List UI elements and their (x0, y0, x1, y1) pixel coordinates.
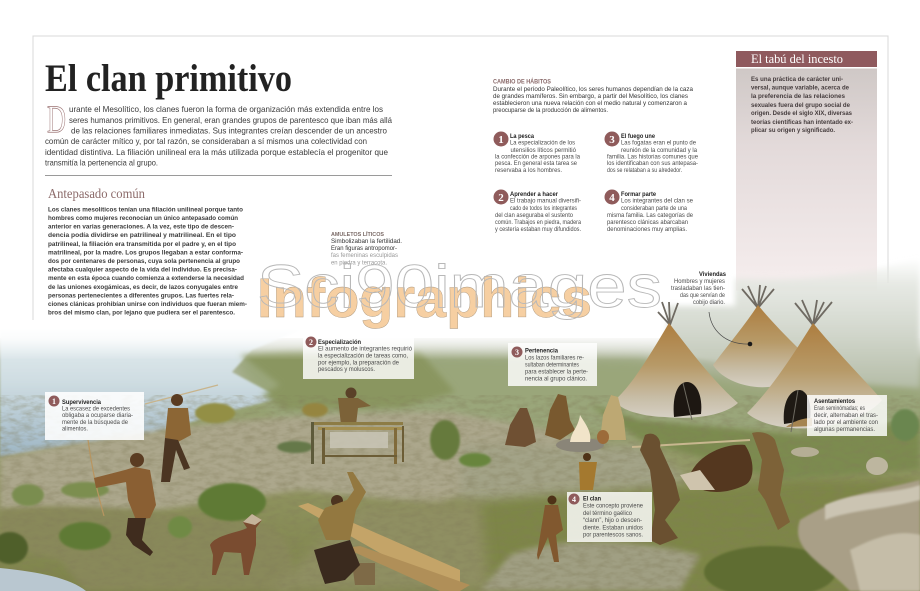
callout: el clan: diente. Estaban unidos (583, 526, 643, 532)
panel text: versal, aunque variable, acerca de (751, 85, 849, 92)
grass tufts (0, 403, 919, 591)
article text: bros del mismo clan, por lejano que pudiera ser el parentesco. (48, 310, 235, 317)
callout: supervivencia: Supervivencia (62, 400, 102, 406)
article text: de las uniones exogámicas, es decir, de lazos conyugales entre (48, 284, 238, 291)
section: cambio de hábitos (493, 78, 693, 114)
callout: viviendas: Viviendas (699, 272, 727, 278)
panel text: origen. Desde el siglo XIX, diversas (751, 110, 852, 117)
stone path left (0, 412, 610, 510)
section intro (493, 86, 693, 114)
intro text (45, 105, 392, 168)
article text: matrilineal, por la madre. Los grupos llegaban a estar conforma- (48, 249, 243, 256)
item 2: aprender a hacer: cado de todos los integrantes (510, 205, 577, 212)
fire (570, 415, 590, 442)
article text (48, 206, 247, 317)
pot (597, 430, 609, 444)
panel text: Es una práctica de carácter uni- (751, 76, 843, 83)
page frame (33, 36, 888, 320)
hut 2 (rear) (713, 285, 800, 387)
item 1: la pesca (494, 132, 580, 174)
item 4: formar parte: 4 (609, 192, 615, 204)
item 3: el fuego une: 3 (609, 134, 615, 146)
left carrier (640, 434, 680, 545)
item 1: la pesca: la confección de arpones para la (495, 154, 580, 160)
outline wordmark: Sci90images (257, 253, 662, 320)
callout: especialización: 2 (309, 338, 313, 347)
callout: especialización (303, 332, 414, 379)
callout: especialización: Especialización (318, 340, 361, 346)
item 2: aprender a hacer: El trabajo manual diversifi- (510, 198, 581, 204)
sky fade (0, 326, 920, 360)
panel text: teorías científicas han intentado ex- (751, 119, 853, 126)
illustration: prehistoric landscape (0, 258, 920, 591)
ground texture (0, 395, 920, 591)
article text: ciones clánicas prohibían unirse con individuos que fueran miem- (48, 301, 247, 308)
callout: viviendas (671, 272, 752, 346)
panel text: sexuales fuera del grupo social de (751, 102, 850, 109)
item 4: formar parte: Formar parte (621, 191, 656, 198)
callout: viviendas: cobijo diario. (693, 300, 725, 306)
article text: personas pertenecientes a diferentes grupos. Las fuertes rela- (48, 292, 234, 299)
panel text: la preferencia de las relaciones (751, 93, 845, 100)
intro text: transmitía la pertenencia al grupo. (45, 158, 158, 168)
callout: pertenencia: nencia al grupo clánico. (525, 376, 587, 382)
item 1: la pesca: utensilios líticos permitió (510, 147, 576, 154)
person seated left (505, 408, 536, 447)
campfire group (505, 394, 626, 452)
callout: pertenencia (508, 343, 597, 386)
item 3: el fuego une: los identificaban con sus antepasa- (607, 160, 698, 167)
note: amuletos líticos: en piedra y terracota. (331, 260, 387, 266)
figure: child (579, 453, 597, 490)
callout: especialización: El aumento de integrantes requirió (318, 346, 413, 352)
figure: dog (210, 514, 262, 575)
callout: pertenencia: 3 (515, 348, 519, 357)
callout: asentamientos: decir, alternaban el tras- (814, 413, 878, 419)
mid green patches (0, 506, 292, 591)
callout: pertenencia: Pertenencia (525, 348, 559, 354)
far vegetation (240, 352, 455, 410)
ground (0, 338, 920, 591)
stone ring (556, 438, 604, 452)
orange wordmark: Infographics (257, 266, 592, 329)
callout: especialización: por ejemplo, la preparación de (318, 360, 400, 366)
panel text: plicar su origen y significado. (751, 127, 835, 134)
panel heading band: El tabú del incesto (751, 51, 843, 66)
watermark (257, 253, 662, 329)
note: amuletos líticos (331, 230, 402, 266)
intro text: identidad distintiva. La filiación unilineal era la más utilizada porque establecía el progenitor que (45, 148, 388, 157)
item 3: el fuego une: familia. Las historias comunes que (607, 154, 698, 160)
callout: el clan: por parentescos sanos. (583, 532, 643, 538)
callout: supervivencia (45, 392, 144, 440)
item 4: formar parte (604, 190, 693, 233)
item 3: el fuego une (604, 132, 698, 174)
item 4: formar parte: consideraban parte de una (621, 205, 687, 212)
intro text: de las relaciones familiares inmediatas. Sus integrantes creían descender de un ancestro (71, 126, 387, 136)
section intro: Durante el período Paleolítico, los seres humanos dependían de la caza (493, 86, 693, 93)
intro text: común de carácter mítico y, por tal razón, se consideraban a sí mismos una colectividad con (45, 137, 367, 146)
callout: viviendas: Hombres y mujeres (674, 279, 725, 285)
callout: supervivencia: mente de la búsqueda de (62, 420, 129, 426)
item 2: aprender a hacer: y cestería estaban muy difundidos. (495, 226, 581, 233)
item 4: formar parte: parentesco clánicas abarcaban (607, 219, 688, 226)
item 1: la pesca: reservaba a los hombres. (495, 167, 562, 174)
callout: asentamientos: Asentamientos (814, 399, 856, 405)
callout: viviendas: trasladaban las tien- (671, 286, 725, 292)
figure: man working wood (314, 472, 366, 584)
item 1: la pesca: La especialización de los (510, 140, 575, 146)
rocks bottom right (798, 480, 920, 591)
note: amuletos líticos: Eran figuras antropomor- (331, 245, 397, 252)
sea (0, 330, 300, 457)
callout: el clan: 4 (572, 495, 576, 504)
panel heading band (736, 51, 877, 67)
item 1: la pesca: 1 (498, 134, 504, 146)
section intro: establecieron una nueva relación con el medio natural y comenzaron a (493, 100, 687, 107)
note: amuletos líticos: fas femeninas esculpidas (331, 252, 398, 259)
far green land (230, 353, 920, 432)
figure: archer (88, 440, 156, 556)
figure: walking child (537, 496, 563, 562)
article text: patrilineal, la filiación era transmitida por el padre y, en el tipo (48, 241, 236, 248)
item 3: el fuego une: dos se relataban a su alrededor. (607, 167, 682, 174)
callout: asentamientos: algunas permanencias. (814, 427, 875, 433)
item 2: aprender a hacer (494, 190, 581, 233)
callout: asentamientos: Eran seminómadas; es (814, 406, 865, 412)
item 1: la pesca: La pesca (510, 133, 534, 140)
callout: supervivencia: La escasez de excedentes (62, 406, 130, 412)
item 2: aprender a hacer: 2 (498, 192, 504, 204)
drying rack with fish (311, 422, 404, 464)
article text: Los clanes mesolíticos tenían una filiación unilineal porque tanto (48, 206, 243, 214)
distant misty hills (668, 258, 920, 388)
panel: el tabú del incesto (736, 51, 877, 290)
note: amuletos líticos: Simbolizaban la fertilidad. (331, 238, 402, 245)
figure: spear carrier (145, 385, 218, 482)
section label: CAMBIO DE HÁBITOS (493, 78, 551, 86)
item 4: formar parte: denominaciones muy amplias. (607, 226, 687, 233)
item 2: aprender a hacer: común. Trabajos en piedra, madera (495, 219, 581, 226)
hide of animal (688, 445, 752, 492)
panel background (736, 68, 877, 290)
intro text: seres humanos primitivos. En general, eran grandes grupos de parentesco que iban más allá (69, 116, 392, 125)
item 2: aprender a hacer: Aprender a hacer (510, 191, 559, 198)
callout: el clan: El clan (583, 496, 601, 502)
article text: mente en esta época cuando comienza a extenderse la necesidad (48, 275, 244, 282)
callout: especialización: la especialización de tareas como, (318, 354, 408, 360)
item 1: la pesca: pesca. En general esta tarea se (495, 160, 577, 167)
callout: especialización: pescados y moluscos. (318, 367, 375, 373)
item 4: formar parte: misma familia. Las categorías de (607, 212, 693, 219)
logs (298, 503, 470, 591)
callout: supervivencia: alimentos. (62, 426, 88, 432)
callout: asentamientos: lado por el ambiente con (814, 420, 878, 426)
intro rule (45, 175, 392, 176)
title: El clan primitivo (45, 57, 292, 100)
item 3: el fuego une: reunión de la comunidad y la (621, 147, 697, 154)
callout: pertenencia: para establecer la perte- (525, 370, 588, 376)
item 3: el fuego une: El fuego une (621, 133, 655, 140)
item 4: formar parte: Los integrantes del clan se (621, 198, 693, 204)
callout: el clan: del término gaélico (583, 511, 633, 517)
callout: pertenencia: Los lazos familiares re- (525, 356, 584, 362)
person seated centre (545, 394, 575, 440)
leader line (709, 312, 752, 346)
hut 1 (615, 302, 738, 420)
article text: anterior en varias generaciones. A la vez, este tipo de descen- (48, 224, 234, 231)
callout: supervivencia: obligaba a ocuparse diaria- (62, 413, 133, 419)
figure: worker at drying rack (338, 388, 371, 425)
section intro: de grandes mamíferos. Sin embargo, a partir del Mesolítico, los clanes (493, 93, 688, 100)
callout: asentamientos (807, 395, 887, 436)
callout: el clan: “clann”, hijo o descen- (583, 518, 642, 524)
item 2: aprender a hacer: del clan aseguraba el sustento (495, 212, 573, 219)
callout: pertenencia: sultaban determinantes (525, 362, 579, 368)
callout: el clan: Este concepto proviene (583, 504, 644, 510)
heading: antepasado común: Antepasado común (48, 186, 145, 201)
person seated right (600, 395, 626, 440)
article text: afectaba cualquier aspecto de la vida del individuo. Es precisa- (48, 267, 237, 274)
article text: dencia podía dividirse en patrilineal y matrilineal. En el tipo (48, 232, 236, 239)
intro text: urante el Mesolítico, los clanes fueron la forma de organización más extendida entre los (69, 105, 383, 114)
panel text (751, 76, 853, 134)
section intro: preocuparse de la producción de alimentos. (493, 107, 608, 114)
pole (632, 440, 750, 447)
right carrier (752, 432, 790, 530)
item 3: el fuego une: Las fogatas eran el punto de (621, 140, 696, 146)
callout: el clan (567, 492, 652, 542)
pond bottom left (0, 568, 86, 591)
stone path centre (460, 445, 690, 505)
callout: supervivencia: 1 (52, 397, 56, 406)
note: amuletos líticos: AMULETOS LÍTICOS (331, 230, 384, 238)
hut 3 (747, 300, 882, 432)
figures carrying animal (632, 432, 790, 545)
article text: dos por centenares de personas, cuya sola pertenencia al grupo (48, 258, 240, 265)
article text: hombres como mujeres reconocían un único antepasado común (48, 215, 238, 222)
callout: viviendas: das que servían de (680, 293, 726, 299)
drop cap: D (47, 98, 66, 141)
